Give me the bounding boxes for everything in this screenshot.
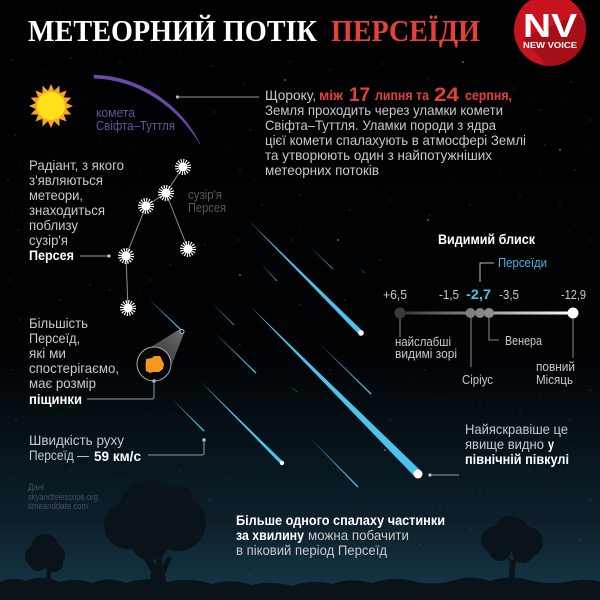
scale leaders (400, 313, 573, 367)
text block: annual passage: Щороку, (265, 87, 316, 103)
scale labels: найслабші (395, 335, 451, 349)
scale labels: Сіріус (462, 373, 493, 387)
constellation label: Персея (188, 201, 226, 215)
brightness scale (383, 231, 586, 387)
text block: annual passage: та утворюють один з найпотужніших (265, 147, 492, 163)
text block: radiant: метеори, (29, 187, 83, 203)
constellation label: сузір'я (188, 188, 222, 202)
title: ПЕРСЕЇДИ (331, 13, 480, 48)
icon: sand grain (146, 356, 164, 373)
text block: peak rate: можна побачити (308, 527, 409, 543)
text block: particle size: має розмір (29, 375, 96, 391)
text block: radiant (29, 157, 124, 263)
text block: particle size: піщинки (29, 391, 82, 407)
tree: right (481, 516, 543, 590)
title: МЕТЕОРНИЙ ПОТІК (28, 13, 317, 48)
landscape silhouette (0, 480, 600, 600)
magnitude values: -2,7 (466, 287, 491, 302)
tree: big (104, 480, 206, 590)
constellation label (188, 188, 226, 215)
text block: northern hemisphere (465, 421, 569, 467)
comet label (96, 106, 175, 133)
magnitude values: -1,5 (439, 287, 459, 302)
sources: timeanddate.com (28, 501, 88, 511)
text block: radiant: Персея (29, 247, 74, 263)
constellation Perseus (120, 162, 194, 314)
scale labels: повний (536, 360, 575, 374)
leader line: sand grain (87, 380, 155, 399)
text block: annual passage: серпня, (465, 87, 512, 103)
leader line: comet to text (176, 95, 259, 99)
scale bar (394, 308, 578, 318)
text block: annual passage (265, 85, 526, 178)
text block: speed: Персеїд — (29, 447, 89, 463)
text block: annual passage: 24 (434, 85, 460, 106)
logo: NV New Voice: NEW VOICE (523, 40, 577, 50)
text block: annual passage: цієї комети спалахують в атмосфері Землі (265, 132, 526, 148)
Perseids label (480, 256, 547, 282)
meteors (149, 221, 422, 488)
logo: NV New Voice (514, 0, 586, 66)
brightness heading: Видимий блиск (438, 231, 536, 247)
text block: particle size: які ми (29, 345, 66, 361)
text block: annual passage: 17 (349, 85, 370, 106)
text block: particle size: Більшість (29, 315, 88, 331)
scale labels: Венера (505, 334, 542, 348)
text block: speed: 59 км/с (94, 448, 141, 464)
text block: annual passage: Свіфта–Туттля. Уламки породи з ядра (265, 117, 496, 133)
comet arc (94, 75, 200, 144)
magnitude values (383, 287, 586, 302)
text block: peak rate: в піковий період Персеїд (236, 542, 387, 558)
text block: radiant: з'являються (29, 172, 103, 188)
text block: peak rate: за хвилину (236, 527, 304, 543)
sources: skyandtelescope.org, (28, 492, 100, 502)
text block: annual passage: між (319, 87, 344, 103)
logo: NV New Voice: NV (523, 7, 577, 44)
text block: particle size: Персеїд, (29, 330, 80, 346)
text block: particle size: спостерігаємо, (29, 360, 119, 376)
magnitude values: -3,5 (499, 287, 519, 302)
text block: annual passage: метеорних потоків (265, 162, 379, 178)
hills (0, 578, 600, 600)
sources (28, 482, 100, 511)
text block: northern hemisphere: північній півкулі (465, 451, 569, 467)
scale labels: видимі зорі (395, 347, 457, 361)
sources: Дані (28, 482, 44, 492)
comet label: Свіфта–Туттля (96, 119, 175, 133)
magnitude values: -12,9 (561, 287, 586, 302)
icon: sun (29, 84, 73, 128)
magnitude values: +6,5 (383, 287, 407, 302)
text block: annual passage: Земля проходить через уламки комети (265, 102, 503, 118)
scale labels (395, 334, 575, 387)
text block: particle size (29, 315, 119, 407)
magnified particle (137, 329, 184, 381)
text block: radiant: знаходиться (29, 202, 105, 218)
text block: speed: Швидкість руху (29, 432, 124, 448)
text block: northern hemisphere: явище видно (465, 436, 544, 452)
scale labels: Місяць (536, 373, 573, 387)
text block: radiant: сузір'я (29, 232, 68, 248)
text block: radiant: Радіант, з якого (29, 157, 124, 173)
Perseids label: Персеїди (498, 256, 547, 270)
leader line: northern hemisphere (428, 473, 459, 477)
text block: northern hemisphere: Найяскравіше це (465, 421, 568, 437)
text block: peak rate: Більше одного спалаху частинки (236, 512, 445, 528)
text block: annual passage: липня та (375, 87, 429, 103)
text block: peak rate (236, 512, 445, 558)
text block: radiant: поблизу (29, 217, 78, 233)
comet label: комета (96, 106, 135, 120)
leader line: speed (148, 439, 205, 455)
leader line: Perseus (80, 254, 111, 258)
text block: northern hemisphere: у (548, 436, 554, 452)
text block: speed (29, 432, 141, 464)
tree: small (25, 534, 65, 590)
